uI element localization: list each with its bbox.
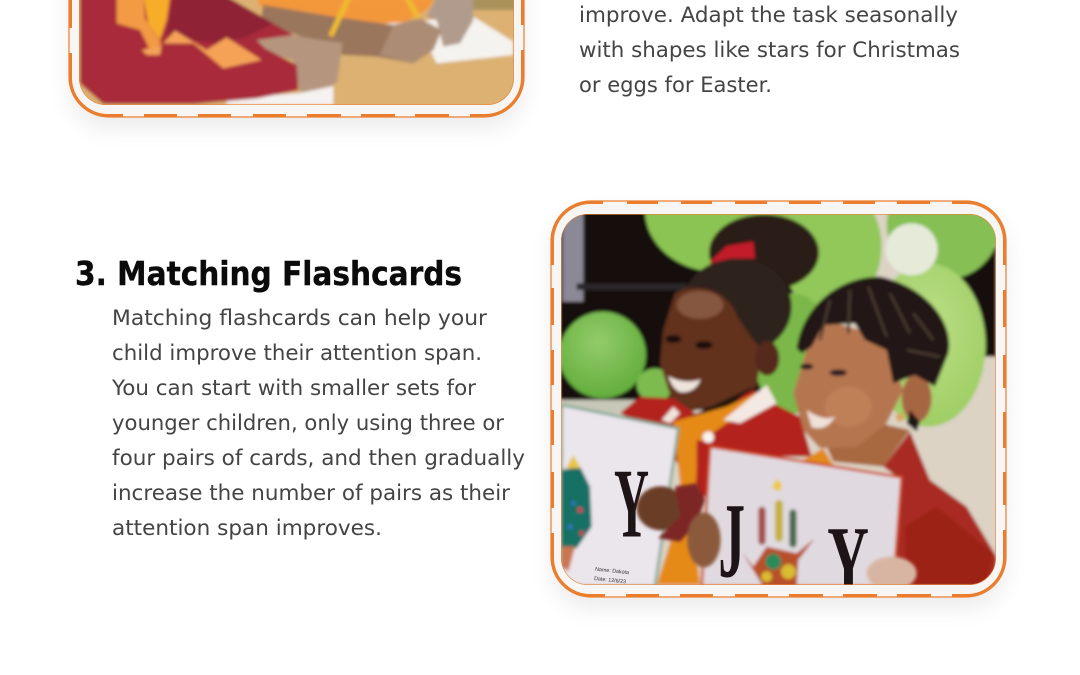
- right flashcard: [702, 447, 902, 587]
- text block: step 2 description, end: [579, 3, 960, 97]
- left flashcard: [562, 405, 678, 587]
- text block: step 2 description, end: or eggs for Easter.: [579, 73, 772, 97]
- photo background: [560, 210, 1000, 590]
- text block: step 3 description: You can start with smaller sets for: [111, 376, 476, 400]
- flashcard letters: [614, 472, 868, 584]
- text block: step 2 description, end: improve. Adapt the task seasonally: [579, 3, 958, 27]
- text block: step 3 description: Matching flashcards can help your: [112, 306, 487, 330]
- text block: step 3 description: increase the number of pairs as their: [112, 481, 510, 505]
- text block: step 3 description: younger children, only using three or: [112, 411, 504, 435]
- hands and scrunchie: [637, 483, 917, 590]
- text block: step 3 description: attention span improves.: [112, 516, 382, 540]
- flashcard letters: J: [718, 483, 745, 601]
- heading: 3. Matching Flashcards: 3. Matching Flashcards: [75, 254, 462, 293]
- flashcard letters: Y: [614, 450, 649, 559]
- green balloons: [562, 214, 996, 428]
- handwritten name on card: [594, 567, 629, 584]
- photo: children writing at a table: [77, 0, 517, 110]
- handwritten name on card: Name: Dakota: [595, 567, 629, 576]
- girl one: [620, 214, 819, 585]
- text block: step 3 description: child improve their attention span.: [112, 341, 482, 365]
- flashcard letters: Y: [827, 507, 869, 616]
- panel: step 3 photo frame: [550, 200, 1008, 610]
- panel: step 2 photo frame: [69, 0, 524, 117]
- text block: step 3 description: four pairs of cards, and then gradually: [112, 446, 525, 470]
- girl two: [793, 277, 997, 587]
- text block: step 3 description: [111, 306, 525, 540]
- photo: two girls holding JOY flashcards: [561, 214, 996, 585]
- handwritten name on card: Date: 12/6/23: [594, 576, 626, 585]
- text block: step 2 description, end: with shapes like stars for Christmas: [579, 38, 960, 62]
